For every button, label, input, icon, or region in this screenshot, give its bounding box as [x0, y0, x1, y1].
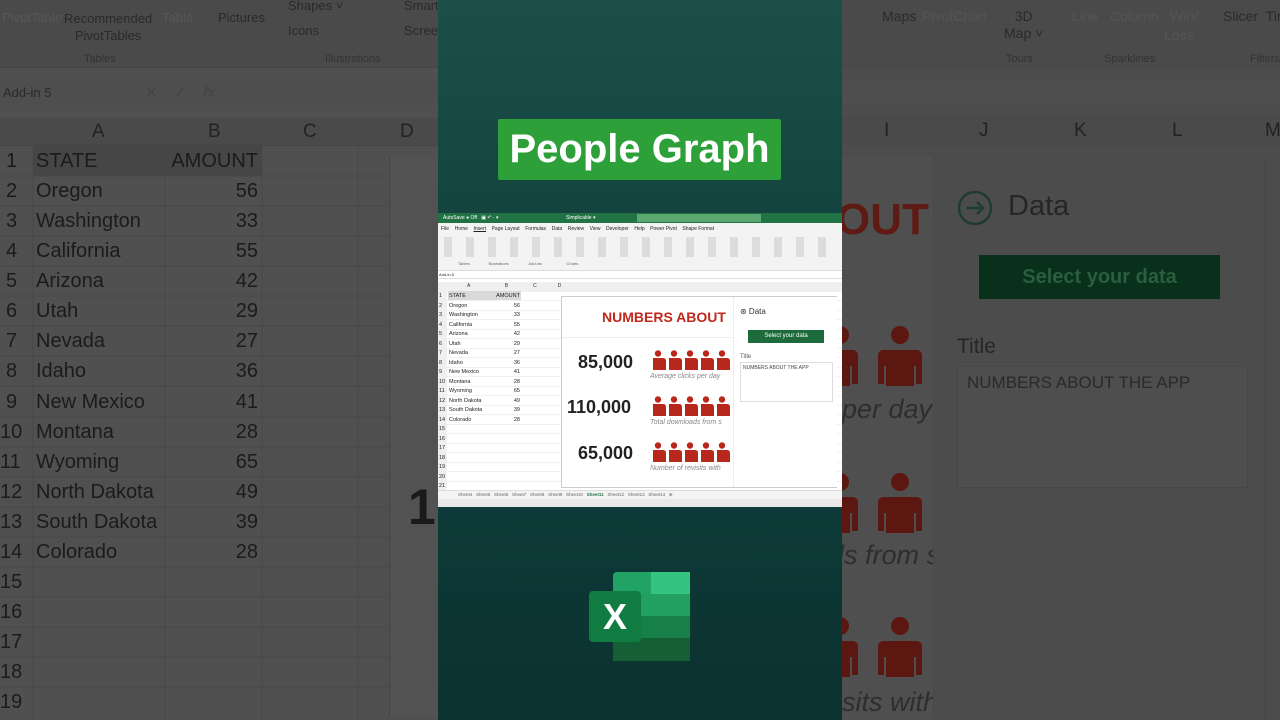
screenshot: 4	[439, 322, 442, 328]
data table: New Mexico	[36, 391, 145, 413]
panel: right dimmed task pane: Line Column Win/	[1072, 8, 1198, 24]
column headers: C	[303, 121, 317, 142]
data table: 12	[0, 481, 22, 503]
screenshot: Simplicable ▾	[566, 215, 595, 221]
ribbon: Table	[162, 10, 193, 25]
data table	[0, 150, 258, 713]
screenshot: 13	[439, 407, 445, 413]
screenshot: 15	[439, 426, 445, 432]
data table: 42	[236, 270, 258, 292]
chart in screenshot: Average clicks per day	[650, 373, 720, 380]
formula bar: ✕ ✓ fx	[145, 84, 215, 101]
screenshot	[438, 213, 842, 507]
panel: right dimmed task pane: PivotChart	[922, 8, 987, 24]
button	[979, 255, 1220, 299]
task pane	[935, 157, 1265, 720]
data table: Idaho	[36, 360, 86, 382]
panel: right dimmed task pane	[842, 0, 1280, 720]
screenshot: Arizona	[449, 331, 468, 337]
screenshot: North Dakota	[449, 398, 481, 404]
screenshot: Nevada	[449, 350, 468, 356]
screenshot: 7	[439, 350, 442, 356]
chart border fragment	[389, 157, 449, 717]
data table: 49	[236, 481, 258, 503]
screenshot: 1	[439, 293, 442, 299]
screenshot: AutoSave ● Off ▣ ↶ · ▾	[443, 215, 498, 221]
ribbon: Pictures	[218, 10, 265, 25]
chart in screenshot: 65,000	[578, 443, 633, 463]
screenshot: Utah	[449, 340, 461, 346]
data table: AMOUNT	[171, 150, 258, 172]
data table: 41	[236, 391, 258, 413]
data table: 18	[0, 661, 22, 683]
screenshot: Washington	[449, 312, 478, 318]
chart in screenshot: 110,000	[567, 397, 631, 417]
data table: 36	[236, 360, 258, 382]
ribbon	[0, 0, 438, 68]
data table: 39	[236, 511, 258, 533]
screenshot: 21	[439, 483, 445, 489]
data table: North Dakota	[36, 481, 154, 503]
data table: 14	[0, 541, 22, 563]
chart in screenshot: NUMBERS ABOUT	[602, 309, 726, 325]
screenshot: 12	[439, 398, 445, 404]
data table: Nevada	[36, 330, 105, 352]
data table: 6	[6, 300, 17, 322]
screenshot: 18	[439, 454, 445, 460]
task pane: NUMBERS ABOUT THE APP	[967, 373, 1190, 392]
screenshot: Wyoming	[449, 388, 472, 394]
chart in screenshot: Title	[740, 354, 751, 360]
screenshot: Tables Illustrations Add-ins Charts	[458, 261, 578, 266]
button: Select your data	[1022, 266, 1177, 288]
formula bar	[0, 80, 438, 105]
data table: 17	[0, 631, 22, 653]
screenshot: 27	[514, 350, 520, 356]
column headers	[0, 118, 438, 146]
ribbon: Illustrations	[325, 53, 381, 65]
screenshot: 19	[439, 464, 445, 470]
data table: Wyoming	[36, 451, 119, 473]
chart in screenshot	[561, 296, 837, 488]
chart in screenshot: Select your data	[764, 333, 808, 339]
screenshot: Montana	[449, 378, 470, 384]
panel: right dimmed task pane: Maps	[882, 8, 916, 24]
data table: Washington	[36, 210, 141, 232]
title	[498, 119, 781, 180]
data table: Arizona	[36, 270, 104, 292]
screenshot: 41	[514, 369, 520, 375]
screenshot: Idaho	[449, 360, 463, 366]
screenshot: 42	[514, 331, 520, 337]
task pane: Title	[957, 335, 996, 358]
data table: 1	[6, 150, 17, 172]
chart in screenshot: ⊛ Data	[740, 307, 766, 316]
screenshot: Add-in 5	[439, 272, 454, 277]
screenshot: A B C D	[467, 283, 561, 289]
panel: right dimmed task pane: Filters	[1250, 53, 1280, 65]
data table: 4	[6, 240, 17, 262]
formula bar: Add-in 5	[3, 85, 51, 100]
data table: 5	[6, 270, 17, 292]
data table: 56	[236, 180, 258, 202]
data table: 55	[236, 240, 258, 262]
screenshot: Colorado	[449, 416, 471, 422]
ribbon: Icons	[288, 23, 319, 38]
panel: right dimmed task pane: K	[1074, 120, 1087, 141]
screenshot: 9	[439, 369, 442, 375]
screenshot: 6	[439, 340, 442, 346]
screenshot: AMOUNT	[496, 293, 520, 299]
screenshot: 10	[439, 378, 445, 384]
data table: 27	[236, 330, 258, 352]
data table: 33	[236, 210, 258, 232]
screenshot: 56	[514, 302, 520, 308]
screenshot: 39	[514, 407, 520, 413]
chart in screenshot: Total downloads from s	[650, 419, 722, 426]
screenshot: 33	[514, 312, 520, 318]
screenshot: 16	[439, 436, 445, 442]
panel: left dimmed spreadsheet	[0, 0, 438, 720]
chart in screenshot: Number of revisits with	[650, 465, 721, 472]
chart fragment: per day	[842, 394, 932, 424]
data table: 29	[236, 300, 258, 322]
screenshot: New Mexico	[449, 369, 479, 375]
screenshot: 11	[439, 388, 445, 394]
screenshot: 29	[514, 340, 520, 346]
ribbon: Recommended	[64, 11, 152, 26]
ribbon: Tables	[84, 53, 116, 65]
data table: California	[36, 240, 120, 262]
screenshot: Oregon	[449, 302, 467, 308]
screenshot: Sheet4 Sheet5 Sheet6 Sheet7 Sheet8 Sheet9 Sheet10 Sheet11 Sheet12 Sheet13 Sheet14 ⊕	[458, 492, 673, 497]
data table: Utah	[36, 300, 78, 322]
screenshot: 49	[514, 398, 520, 404]
panel: right dimmed task pane: Tours	[1006, 53, 1033, 65]
screenshot: South Dakota	[449, 407, 482, 413]
column headers: D	[400, 121, 414, 142]
panel: right dimmed task pane: J	[979, 120, 988, 141]
screenshot: 2	[439, 302, 442, 308]
ribbon: PivotTables	[75, 28, 141, 43]
data table: STATE	[36, 150, 97, 172]
data table: 8	[6, 360, 17, 382]
icon: Excel logo	[589, 572, 690, 661]
icon: Excel logo: X	[603, 596, 627, 637]
title: People Graph	[509, 127, 770, 171]
panel: right dimmed task pane: L	[1172, 120, 1183, 141]
screenshot: 55	[514, 322, 520, 328]
data table: 16	[0, 601, 22, 623]
data table: 28	[236, 421, 258, 443]
screenshot: 3	[439, 312, 442, 318]
data table: 10	[0, 421, 22, 443]
data table: Montana	[36, 421, 114, 443]
panel: right dimmed task pane: Sparklines	[1104, 53, 1155, 65]
data table: 15	[0, 571, 22, 593]
data table: 3	[6, 210, 17, 232]
data table: 7	[6, 330, 17, 352]
screenshot: 14	[439, 416, 445, 422]
data table: 65	[236, 451, 258, 473]
ribbon: PivotTable	[2, 10, 62, 25]
icon: arrow circle	[958, 190, 992, 226]
screenshot: 36	[514, 360, 520, 366]
data table: 13	[0, 511, 22, 533]
chart in screenshot: NUMBERS ABOUT THE APP	[743, 365, 809, 371]
data table: South Dakota	[36, 511, 157, 533]
screenshot: 17	[439, 445, 445, 451]
screenshot: California	[449, 322, 472, 328]
panel: right dimmed task pane: 3D	[1015, 8, 1033, 24]
screenshot: File Home Insert Page Layout Formulas Data Review View Developer Help Power Pivot Shape Format	[441, 226, 714, 232]
screenshot: 5	[439, 331, 442, 337]
data table: 28	[236, 541, 258, 563]
screenshot: 28	[514, 378, 520, 384]
data table: 19	[0, 691, 22, 713]
data table: Colorado	[36, 541, 117, 563]
screenshot: 65	[514, 388, 520, 394]
data table: 9	[6, 391, 17, 413]
panel: right dimmed task pane: Loss	[1164, 27, 1194, 43]
panel: left dimmed spreadsheet: 1	[408, 479, 436, 535]
panel: center teal	[438, 0, 842, 720]
column headers: A	[92, 121, 105, 142]
screenshot: 20	[439, 474, 445, 480]
panel: right dimmed task pane: I	[884, 120, 889, 141]
task pane: Data	[1008, 190, 1069, 222]
screenshot: 28	[514, 416, 520, 422]
screenshot: STATE	[449, 293, 466, 299]
data table: 11	[0, 451, 21, 473]
data table: 2	[6, 180, 17, 202]
panel: right dimmed task pane: Map ˅	[1004, 25, 1043, 41]
data table: Oregon	[36, 180, 103, 202]
chart fragment	[842, 157, 934, 720]
chart in screenshot: 85,000	[578, 352, 633, 372]
column headers: B	[208, 121, 221, 142]
screenshot: 8	[439, 360, 442, 366]
